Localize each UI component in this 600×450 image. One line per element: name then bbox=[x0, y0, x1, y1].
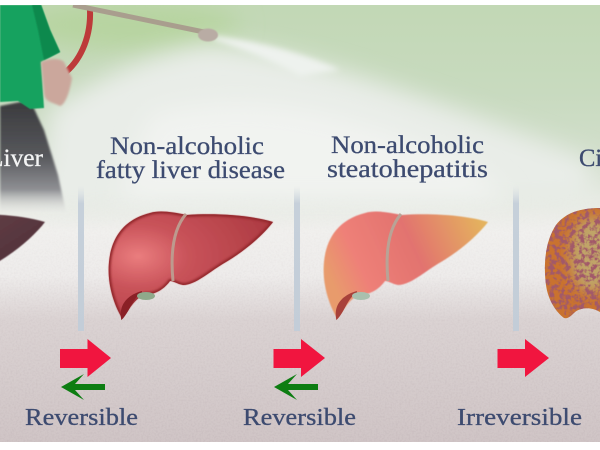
hand bbox=[41, 59, 72, 106]
label: Non-alcoholic steatohepatitis: steatohepatitis bbox=[327, 156, 488, 183]
green shirt bbox=[0, 5, 60, 109]
separator 2 bbox=[294, 186, 300, 331]
arrow: forward 2 bbox=[274, 339, 325, 377]
label: Reversible 2: Reversible bbox=[243, 405, 356, 431]
label: Non-alcoholic fatty liver disease bbox=[96, 133, 285, 184]
label: Non-alcoholic steatohepatitis: Non-alcoholic bbox=[331, 132, 484, 159]
liver: cirrhosis (cropped) bbox=[544, 208, 600, 318]
trousers bbox=[0, 100, 66, 212]
grain texture bbox=[9, 275, 592, 441]
arrow: back 1 bbox=[61, 374, 105, 400]
label: Non-alcoholic fatty liver disease: fatty liver disease bbox=[96, 157, 285, 184]
lobe shadow bbox=[122, 292, 142, 318]
pesticide spray cloud bbox=[40, 45, 590, 210]
red hose bbox=[66, 10, 90, 72]
label: Non-alcoholic fatty liver disease: Non-alcoholic bbox=[110, 133, 264, 160]
liver: fatty bbox=[109, 212, 273, 318]
ligament bbox=[172, 214, 186, 281]
green field tint bbox=[20, 1, 240, 49]
lobe shadow bbox=[337, 292, 357, 318]
ligament bbox=[387, 214, 401, 281]
darker rim bbox=[109, 212, 273, 318]
liver: steatohepatitis bbox=[324, 212, 488, 318]
spray jet bbox=[214, 36, 340, 76]
arrow: forward 1 bbox=[60, 339, 111, 377]
separator 3 bbox=[513, 186, 519, 331]
gallbladder bbox=[137, 292, 155, 300]
nodular crust bbox=[544, 208, 600, 317]
liver: healthy (cropped) bbox=[0, 214, 46, 262]
arrow: forward 3 bbox=[498, 339, 549, 377]
arrow: back 2 bbox=[274, 374, 318, 400]
farmer figure bbox=[0, 5, 218, 212]
label: Reversible 1: Reversible bbox=[25, 405, 138, 431]
separator 1 bbox=[78, 186, 84, 331]
shirt sleeve shade bbox=[32, 5, 60, 60]
nozzle bbox=[198, 28, 218, 42]
gallbladder bbox=[352, 292, 370, 300]
label: Irreversible: Irreversible bbox=[457, 405, 582, 431]
pale centre bbox=[570, 217, 600, 293]
label: Non-alcoholic steatohepatitis bbox=[327, 132, 488, 183]
spray wand bbox=[73, 5, 204, 32]
